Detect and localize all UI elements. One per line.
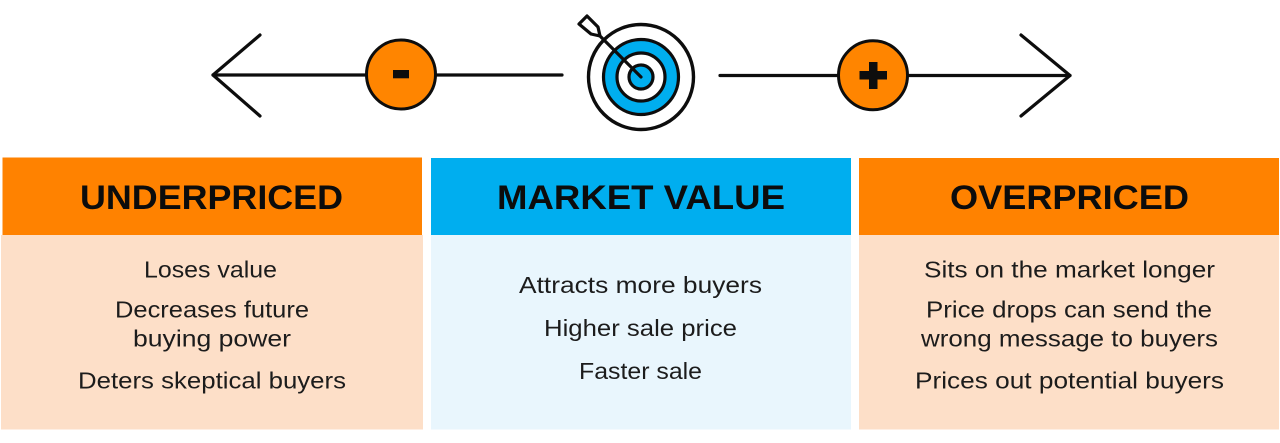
text: market value effects: Higher sale price [544,315,737,341]
panel: underpriced [1,158,423,430]
text: overpriced effects [915,256,1224,394]
text: underpriced effects: Loses value [144,256,277,282]
text: underpriced effects: Decreases future [115,296,309,322]
arrow: overpriced direction [720,35,1070,116]
icon: minus badge [366,40,436,109]
heading: market value: MARKET VALUE [497,179,785,217]
icon: plus badge [838,41,908,110]
panel: overpriced [859,158,1279,430]
arrow: underpriced direction [213,35,562,116]
text: underpriced effects: buying power [133,326,291,352]
icon: target with arrow [579,16,694,130]
text: market value effects: Faster sale [579,358,702,384]
text: overpriced effects: Price drops can send the [926,296,1212,322]
text: underpriced effects: Deters skeptical buyers [78,368,346,394]
panel: market value [431,158,851,430]
text: underpriced effects [78,256,346,394]
heading: overpriced: OVERPRICED [950,179,1189,217]
text: market value effects: Attracts more buyers [519,272,762,298]
text: market value effects [519,272,762,384]
text: overpriced effects: Prices out potential buyers [915,368,1224,394]
heading: underpriced: UNDERPRICED [80,179,343,217]
text: overpriced effects: Sits on the market longer [924,256,1215,282]
text: overpriced effects: wrong message to buyers [920,326,1218,352]
